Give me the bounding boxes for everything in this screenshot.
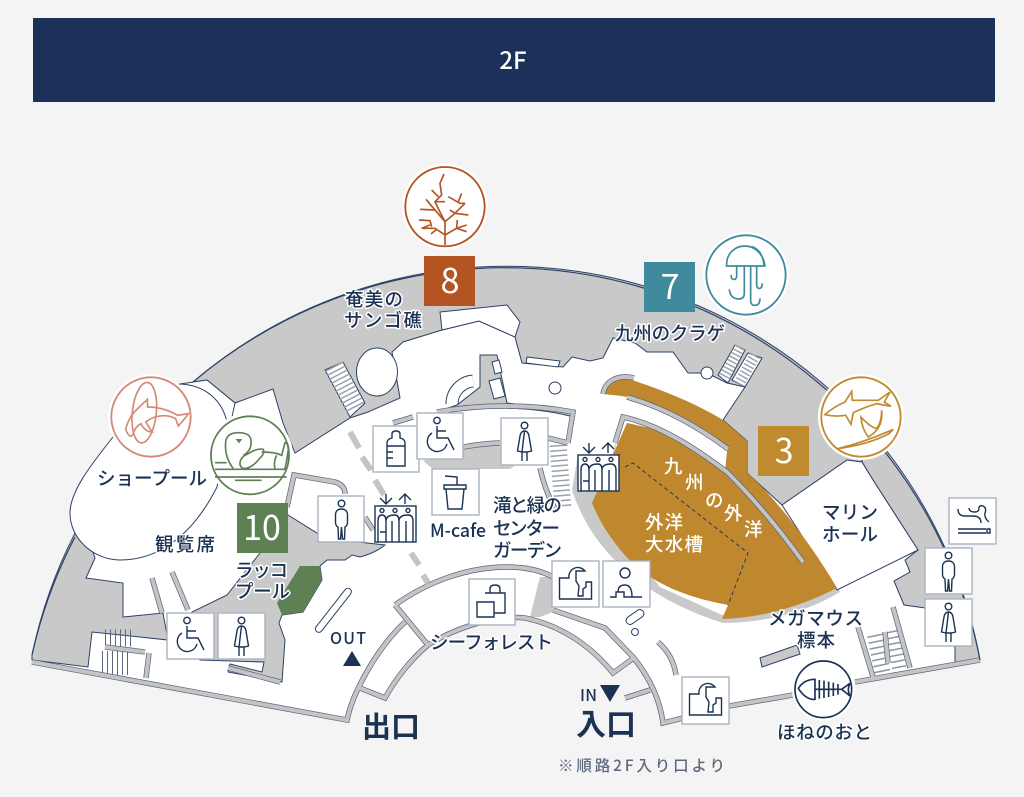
label: coral: サンゴ礁 [344, 307, 422, 333]
icon: woman right [925, 599, 972, 646]
gold outer ocean tank [592, 379, 837, 619]
icon: cup [432, 469, 479, 515]
gold labels: 州 [685, 469, 704, 495]
label: center garden: センター [493, 515, 560, 541]
dashed route markers [350, 432, 428, 583]
icon: wheelchair upper [417, 413, 463, 459]
gold labels: 外洋 [645, 509, 683, 535]
icon: shark and ray [818, 374, 904, 460]
label: otter pool [235, 557, 290, 604]
label: sea forest: シーフォレスト [430, 629, 553, 655]
label: marine hall [822, 499, 878, 547]
gold labels: 大水槽 [645, 531, 703, 557]
label: megamouth: 標本 [797, 627, 835, 653]
number 8 [424, 254, 475, 306]
white rooms [314, 305, 918, 636]
number 7 [644, 260, 695, 312]
stairs [102, 345, 905, 675]
label: jellyfish: 九州のクラゲ [615, 320, 725, 346]
icon: elevator left [375, 494, 416, 542]
icon: jellyfish [703, 232, 789, 318]
entrance label: 入口 [576, 700, 636, 744]
OUT marker [330, 625, 366, 666]
tank divider [625, 463, 748, 605]
label: otter pool: ラッコ [235, 557, 288, 583]
IN marker: IN [580, 682, 597, 706]
label: megamouth [768, 605, 863, 653]
icon: coral [402, 164, 488, 250]
exit label: 出口 [362, 704, 420, 746]
label: center garden: ガーデン [493, 537, 562, 563]
gray back-of-house areas [32, 266, 980, 682]
label: center garden [493, 492, 562, 563]
number 10 [237, 501, 288, 553]
gold labels: 外 [724, 500, 743, 526]
number 3: 3 [775, 424, 793, 473]
icon: sea otter [207, 412, 293, 498]
label: marine hall: ホール [822, 521, 878, 547]
icon: fish skeleton [792, 658, 855, 721]
icon: smoking [949, 498, 996, 544]
icon: reception [603, 561, 650, 607]
icon: woman lower [218, 613, 265, 659]
number 8: 8 [441, 254, 459, 303]
OUT marker: OUT [330, 625, 366, 649]
icon: elevator right [578, 443, 619, 491]
white wedge [623, 399, 727, 470]
label: center garden: 滝と緑の [493, 492, 562, 518]
icon: map lower [682, 677, 729, 724]
gold labels [645, 453, 763, 557]
label: coral: 奄美の [345, 286, 403, 312]
walls [32, 377, 980, 723]
label: otter pool: プール [235, 578, 290, 604]
icon: shopping bags [469, 579, 515, 625]
label: hone no oto: ほねのおと [777, 719, 872, 745]
label: marine hall: マリン [822, 499, 878, 525]
icon: man left [318, 496, 364, 542]
icon: baby bottle [373, 426, 419, 472]
header bar: 2F [499, 41, 527, 76]
icon: woman upper [501, 418, 548, 465]
entrance forecourt [340, 617, 680, 797]
label: megamouth: メガマウス [768, 605, 863, 631]
outer outline [32, 268, 980, 660]
swirl room [452, 381, 473, 404]
label: seats: 観覧席 [155, 531, 215, 557]
icon: map [552, 561, 599, 607]
label: M-cafe: M-cafe [430, 517, 486, 543]
gold labels: の [705, 487, 724, 513]
number 10: 10 [243, 501, 281, 550]
gold labels: 九 [664, 453, 683, 479]
sea otter pool [277, 566, 322, 615]
number 7: 7 [661, 260, 679, 309]
gold labels: 洋 [744, 516, 763, 542]
floor plan base [32, 269, 980, 723]
show pool [70, 380, 235, 560]
number 3 [758, 424, 809, 476]
route note: ※順路2F入り口より [558, 754, 725, 776]
icon: wheelchair lower [167, 613, 214, 659]
IN marker [580, 682, 620, 706]
icon: dolphin and hoop [108, 374, 194, 460]
label: show pool: ショープール [97, 465, 207, 491]
header bar [33, 18, 995, 102]
icon: man right [925, 548, 972, 594]
label: coral [344, 286, 422, 333]
